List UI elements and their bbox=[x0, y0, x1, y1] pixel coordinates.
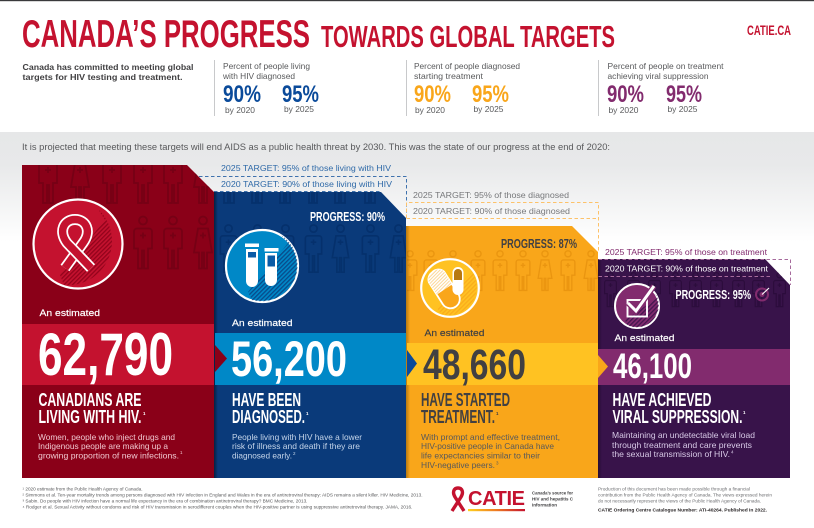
callout: purple targets: 2025 TARGET: 95% of those on treatment bbox=[605, 248, 768, 257]
target group: starting treatment: by 2025 bbox=[474, 104, 504, 114]
title: CANADA’S PROGRESS bbox=[22, 13, 310, 56]
target group: starting treatment: 95% bbox=[472, 81, 509, 108]
number: 46,100: 46,100 bbox=[613, 347, 692, 386]
number band: purple bbox=[598, 349, 790, 385]
description: red: Indigenous people are making up a bbox=[38, 441, 168, 451]
footnotes: ² Simmons et al. Ten-year mortality trends among persons diagnosed with HIV infection in England and Wales in the era of antiretroviral therapy: AIDS remains a silent killer. HIV Medicine, 2013. bbox=[22, 492, 422, 498]
description: amber: HIV-negative peers. bbox=[421, 460, 495, 470]
heading: have started treatment bbox=[421, 390, 510, 427]
heading: have achieved viral suppression: 1 bbox=[743, 410, 746, 415]
title: TOWARDS GLOBAL TARGETS bbox=[321, 20, 615, 54]
description: purple: Maintaining an undetectable viral load bbox=[612, 430, 755, 440]
funding statement: Production of this document has been made possible through a financial bbox=[598, 486, 750, 492]
logo tagline: information bbox=[532, 502, 557, 508]
number: 62,790: 62,790 bbox=[38, 321, 173, 388]
heading: Canadians are living with HIV: 1 bbox=[143, 411, 146, 416]
description: blue: 2 bbox=[293, 451, 296, 456]
icon: test tubes bbox=[226, 230, 298, 302]
target group: diagnosed: 90% bbox=[223, 81, 261, 108]
icon: check box bbox=[615, 284, 659, 328]
progress label: 95%: PROGRESS: 95% bbox=[676, 288, 751, 302]
callout: purple targets bbox=[598, 248, 790, 285]
callout: blue targets: 2020 TARGET: 90% of those living with HIV bbox=[221, 180, 393, 189]
description: red: 1 bbox=[180, 450, 183, 455]
heading: Canadians are living with HIV: LIVING WITH HIV. bbox=[38, 407, 142, 427]
people pattern: orange bbox=[403, 251, 598, 290]
target group: viral suppression: 95% bbox=[666, 81, 702, 108]
funding statement: do not necessarily represent the views of the Public Health Agency of Canada. bbox=[598, 498, 761, 504]
estimated label: purple: An estimated bbox=[614, 333, 674, 344]
website label: CATIE.CA bbox=[747, 22, 791, 38]
target group: diagnosed: by 2020 bbox=[225, 105, 255, 115]
footnotes: ¹ 2020 estimate from the Public Health Agency of Canada. bbox=[22, 486, 142, 492]
target group: viral suppression: 90% bbox=[607, 81, 644, 108]
funding statement bbox=[598, 486, 773, 504]
footnotes: ³ Sabin. Do people with HIV infection have a normal life expectancy in the era of combination antiretroviral therapy? BMC Medicine, 2013. bbox=[22, 498, 308, 504]
description: red: Women, people who inject drugs and bbox=[38, 432, 175, 442]
heading: have been diagnosed bbox=[232, 390, 309, 427]
description: purple bbox=[612, 430, 755, 459]
intro text: targets for HIV testing and treatment. bbox=[22, 72, 182, 82]
description: amber: With prompt and effective treatment, bbox=[421, 432, 560, 442]
arrow: blue to amber bbox=[407, 350, 417, 377]
panel: living with HIV bbox=[22, 151, 214, 478]
target group: viral suppression: Percent of people on treatment bbox=[608, 61, 724, 71]
number: 48,660: 48,660 bbox=[423, 341, 526, 389]
heading: have been diagnosed: 1 bbox=[306, 411, 309, 416]
heading: have started treatment: 1 bbox=[496, 411, 499, 416]
panel: diagnosed bbox=[214, 192, 406, 478]
estimated label: amber: An estimated bbox=[424, 328, 484, 339]
heading: Canadians are living with HIV: CANADIANS ARE bbox=[38, 390, 142, 410]
logo tagline: HIV and hepatitis C bbox=[532, 496, 574, 502]
logo tagline: Canada’s source for bbox=[532, 490, 573, 496]
description: blue: People living with HIV have a lower bbox=[232, 432, 362, 442]
panel: started treatment bbox=[403, 226, 598, 478]
description: red bbox=[38, 432, 183, 460]
target group: diagnosed: by 2025 bbox=[284, 104, 314, 114]
description: amber: HIV-positive people in Canada have bbox=[421, 441, 554, 451]
heading: have achieved viral suppression: VIRAL SUPPRESSION. bbox=[612, 407, 742, 427]
description: blue: diagnosed early. bbox=[232, 450, 292, 460]
target group: viral suppression: achieving viral suppression bbox=[608, 71, 709, 81]
footnotes: ⁴ Rodger et al. Sexual Activity without condoms and risk of HIV transmission in serodifferent couples when the HIV-positive partner is using suppressive antiretroviral therapy. JAMA, 2016. bbox=[22, 504, 413, 510]
estimated label: red: An estimated bbox=[40, 308, 100, 319]
top rule bbox=[0, 0, 814, 1]
number: 56,200: 56,200 bbox=[231, 331, 347, 387]
target group: starting treatment: 90% bbox=[414, 81, 451, 108]
description: purple: through treatment and care prevents bbox=[612, 440, 752, 450]
progress label: 90%: PROGRESS: 90% bbox=[310, 210, 385, 224]
icon: ribbon bbox=[34, 200, 122, 288]
description: red: growing proportion of new infections. bbox=[38, 450, 179, 460]
target group: starting treatment: by 2020 bbox=[415, 105, 445, 115]
callout: blue targets: 2025 TARGET: 95% of those living with HIV bbox=[221, 164, 392, 173]
description: blue: risk of illness and death if they are bbox=[232, 441, 360, 451]
description: purple: 4 bbox=[731, 450, 734, 454]
icon: capsules bbox=[421, 259, 479, 317]
projection statement: It is projected that meeting these targets will end AIDS as a public health threat by 2030. This was the state of our progress at the end of 2020: bbox=[22, 142, 610, 152]
heading: have been diagnosed: HAVE BEEN bbox=[232, 390, 301, 410]
description: amber: life expectancies similar to their bbox=[421, 450, 540, 460]
description: blue bbox=[232, 432, 362, 460]
target group: viral suppression: by 2020 bbox=[608, 105, 639, 115]
target group: starting treatment: Percent of people diagnosed bbox=[414, 61, 520, 71]
heading: have achieved viral suppression: HAVE ACHIEVED bbox=[612, 390, 712, 410]
number band: red bbox=[22, 324, 214, 385]
heading: have started treatment: HAVE STARTED bbox=[421, 390, 510, 410]
target group: diagnosed: 95% bbox=[282, 81, 319, 108]
heading: Canadians are living with HIV bbox=[38, 390, 146, 427]
target group: diagnosed bbox=[214, 60, 319, 116]
people pattern: purple bbox=[605, 273, 785, 307]
callout: amber targets: 2025 TARGET: 95% of those diagnosed bbox=[413, 191, 569, 200]
catalogue line: CATIE Ordering Centre Catalogue Number: ATI-40264. Published in 2022. bbox=[598, 508, 767, 512]
callout: amber targets bbox=[406, 191, 598, 252]
funding statement: contribution from the Public Health Agency of Canada. The views expressed herein bbox=[598, 492, 773, 498]
arrow: amber to purple bbox=[598, 355, 608, 378]
description: amber bbox=[421, 432, 560, 470]
people pattern: blue bbox=[220, 192, 406, 273]
estimated label: blue: An estimated bbox=[232, 318, 292, 329]
panel: viral suppression bbox=[598, 259, 790, 478]
number band: amber bbox=[407, 343, 598, 385]
number band: blue bbox=[215, 333, 406, 385]
target group: diagnosed: Percent of people living bbox=[223, 61, 310, 71]
logo: CATIE: CATIE bbox=[468, 488, 525, 510]
heading: have achieved viral suppression bbox=[612, 390, 746, 427]
intro text: Canada has committed to meeting global bbox=[22, 62, 194, 72]
target group: viral suppression bbox=[598, 60, 724, 116]
target group: starting treatment bbox=[406, 60, 520, 116]
arrow: red to blue bbox=[215, 345, 227, 372]
callout: amber targets: 2020 TARGET: 90% of those diagnosed bbox=[413, 207, 570, 216]
intro text bbox=[22, 62, 194, 82]
heading: have been diagnosed: DIAGNOSED. bbox=[232, 407, 305, 427]
description: purple: the sexual transmission of HIV. bbox=[612, 449, 730, 459]
people pattern: red bbox=[38, 165, 213, 270]
target group: viral suppression: by 2025 bbox=[668, 104, 698, 114]
footnotes bbox=[22, 486, 422, 510]
description: amber: 3 bbox=[496, 460, 499, 466]
background band bbox=[0, 132, 814, 242]
heading: have started treatment: TREATMENT. bbox=[421, 407, 495, 427]
target group: starting treatment: starting treatment bbox=[414, 71, 484, 81]
target group: diagnosed: with HIV diagnosed bbox=[222, 71, 295, 81]
logo tagline bbox=[532, 490, 574, 508]
callout: purple targets: 2020 TARGET: 90% of those on treatment bbox=[605, 264, 769, 274]
progress label: 87%: PROGRESS: 87% bbox=[501, 237, 577, 251]
icon: target bbox=[756, 288, 769, 300]
callout: blue targets bbox=[199, 164, 406, 218]
